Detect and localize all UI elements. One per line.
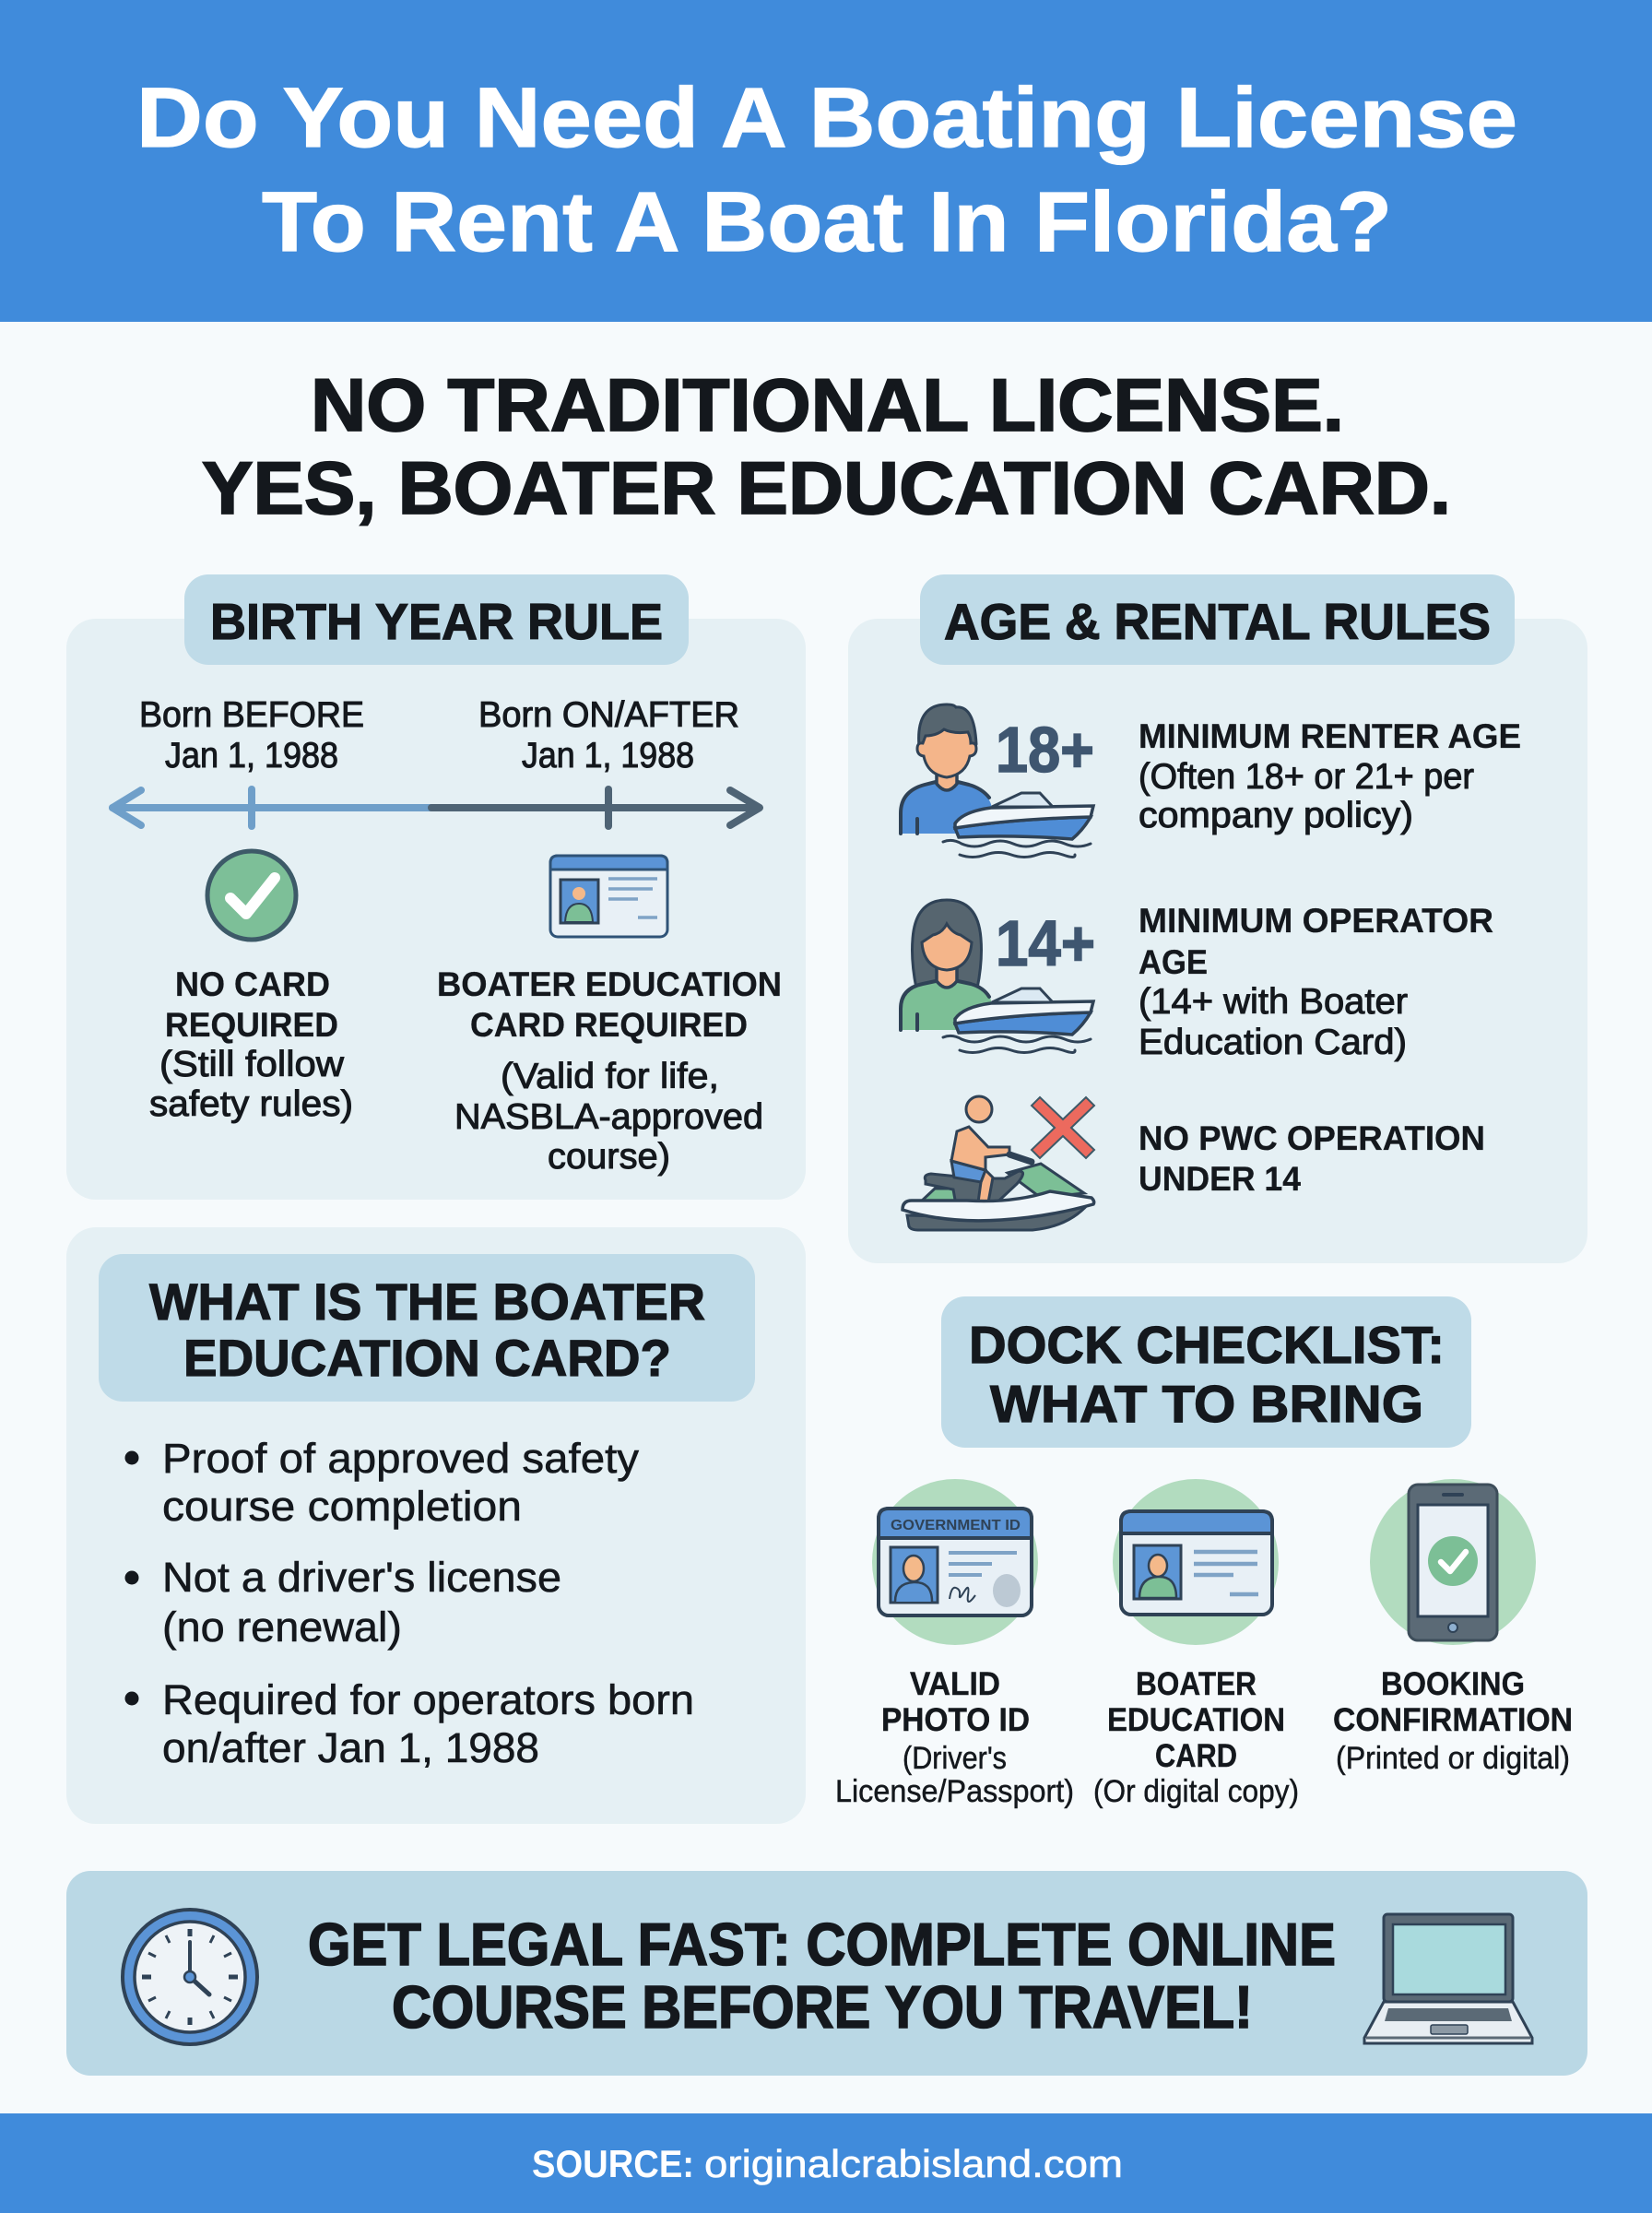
bullet list: Not a driver's license bbox=[162, 1554, 561, 1601]
label: born before: Born BEFORE bbox=[139, 695, 364, 735]
icon: jet ski with rider bbox=[903, 1096, 1094, 1230]
icon: operator with boat bbox=[901, 900, 1093, 1053]
heading: what is the card: EDUCATION CARD? bbox=[183, 1329, 671, 1387]
icon: clock bbox=[123, 1910, 257, 2044]
text: valid photo ID: VALID bbox=[910, 1666, 1000, 1702]
text: booking confirmation: CONFIRMATION bbox=[1333, 1702, 1573, 1738]
timeline arrow bbox=[112, 789, 760, 826]
text: card required: (Valid for life, bbox=[501, 1057, 719, 1096]
callout text: COURSE BEFORE YOU TRAVEL! bbox=[392, 1973, 1253, 2041]
text: valid photo ID: PHOTO ID bbox=[881, 1702, 1030, 1738]
label: born on or after: Born ON/AFTER bbox=[478, 695, 739, 735]
icon: laptop bbox=[1364, 1914, 1532, 2043]
panel: what is the boater education card bbox=[66, 1227, 806, 1824]
icon: government ID bbox=[872, 1479, 1038, 1645]
heading: age and rental rules: AGE & RENTAL RULES bbox=[944, 593, 1491, 650]
text: boater education card bbox=[1093, 1666, 1299, 1809]
icon: education card bbox=[1113, 1479, 1279, 1645]
bullet list: Required for operators born bbox=[162, 1676, 694, 1723]
text: boater education card: CARD bbox=[1155, 1738, 1237, 1774]
icon: government ID: GOVERNMENT ID bbox=[891, 1518, 1021, 1533]
title: To Rent A Boat In Florida? bbox=[262, 175, 1392, 269]
number: 14+: 14+ bbox=[996, 907, 1095, 979]
label: born before bbox=[139, 695, 364, 775]
text: minimum operator age: (14+ with Boater bbox=[1139, 982, 1408, 1022]
heading: what is the card bbox=[99, 1254, 755, 1402]
panel: birth year rule bbox=[66, 574, 806, 1200]
text: minimum renter age: MINIMUM RENTER AGE bbox=[1139, 717, 1521, 755]
bullet list bbox=[125, 1435, 694, 1771]
callout text bbox=[308, 1911, 1336, 2041]
heading: what is the card: WHAT IS THE BOATER bbox=[149, 1272, 705, 1331]
text: minimum operator age: AGE bbox=[1139, 943, 1208, 981]
text: minimum operator age: MINIMUM OPERATOR bbox=[1139, 902, 1493, 940]
text: card required: course) bbox=[548, 1137, 670, 1177]
text: booking confirmation bbox=[1333, 1666, 1573, 1776]
text: minimum renter age: (Often 18+ or 21+ per bbox=[1139, 757, 1474, 797]
icon: green check bbox=[207, 851, 296, 940]
headline answer: YES, BOATER EDUCATION CARD. bbox=[202, 447, 1451, 530]
text: card required: CARD REQUIRED bbox=[470, 1006, 748, 1044]
heading: age and rental rules bbox=[920, 574, 1515, 665]
text: booking confirmation: (Printed or digital) bbox=[1336, 1741, 1570, 1776]
callout text: GET LEGAL FAST: COMPLETE ONLINE bbox=[308, 1911, 1336, 1978]
header banner bbox=[0, 0, 1652, 322]
number: 18+: 18+ bbox=[996, 714, 1094, 786]
icon: renter with boat bbox=[901, 704, 1093, 858]
text: valid photo ID: (Driver's bbox=[903, 1741, 1007, 1776]
headline answer: NO TRADITIONAL LICENSE. bbox=[311, 364, 1344, 447]
icon: phone confirmation bbox=[1370, 1479, 1536, 1645]
label: born on or after bbox=[478, 695, 739, 775]
text: minimum renter age: company policy) bbox=[1139, 796, 1413, 835]
text: minimum operator age bbox=[1139, 902, 1493, 1062]
panel: age and rental rules bbox=[848, 574, 1587, 1263]
text: no card required bbox=[149, 965, 353, 1124]
heading: dock checklist bbox=[941, 1296, 1471, 1448]
bullet list: (no renewal) bbox=[162, 1604, 402, 1651]
text: boater education card: EDUCATION bbox=[1107, 1702, 1285, 1738]
text: no card required: NO CARD bbox=[175, 965, 330, 1003]
source text: originalcrabisland.com bbox=[704, 2142, 1123, 2185]
text: no card required: REQUIRED bbox=[165, 1006, 338, 1044]
text: no card required: safety rules) bbox=[149, 1084, 353, 1124]
text: valid photo ID bbox=[835, 1666, 1074, 1809]
source text bbox=[532, 2142, 1123, 2185]
bullet list: Proof of approved safety bbox=[162, 1435, 640, 1482]
bullet list: course completion bbox=[162, 1483, 522, 1530]
text: booking confirmation: BOOKING bbox=[1381, 1666, 1525, 1702]
text: no PWC operation: NO PWC OPERATION bbox=[1139, 1119, 1485, 1157]
source text: SOURCE: bbox=[532, 2142, 694, 2185]
text: boater education card: (Or digital copy) bbox=[1093, 1774, 1299, 1809]
text: card required bbox=[437, 965, 782, 1177]
text: valid photo ID: License/Passport) bbox=[835, 1774, 1074, 1809]
headline answer bbox=[202, 364, 1451, 530]
label: born on or after: Jan 1, 1988 bbox=[522, 736, 694, 775]
label: born before: Jan 1, 1988 bbox=[165, 736, 338, 775]
heading: birth year rule bbox=[184, 574, 689, 665]
icon: education card bbox=[550, 856, 667, 937]
text: minimum operator age: Education Card) bbox=[1139, 1023, 1407, 1062]
text: no card required: (Still follow bbox=[159, 1045, 345, 1084]
section: dock checklist bbox=[835, 1296, 1573, 1809]
title bbox=[136, 71, 1517, 269]
heading: dock checklist: WHAT TO BRING bbox=[990, 1375, 1423, 1434]
title: Do You Need A Boating License bbox=[136, 71, 1517, 165]
footer bbox=[0, 2113, 1652, 2213]
heading: birth year rule: BIRTH YEAR RULE bbox=[210, 593, 663, 650]
text: minimum renter age bbox=[1139, 717, 1521, 835]
text: no PWC operation bbox=[1139, 1119, 1485, 1198]
text: boater education card: BOATER bbox=[1136, 1666, 1257, 1702]
text: card required: NASBLA-approved bbox=[454, 1097, 763, 1137]
text: card required: BOATER EDUCATION bbox=[437, 965, 782, 1003]
heading: dock checklist: DOCK CHECKLIST: bbox=[969, 1316, 1445, 1375]
call to action banner bbox=[66, 1871, 1587, 2076]
bullet list: on/after Jan 1, 1988 bbox=[162, 1724, 539, 1771]
text: no PWC operation: UNDER 14 bbox=[1139, 1160, 1301, 1198]
